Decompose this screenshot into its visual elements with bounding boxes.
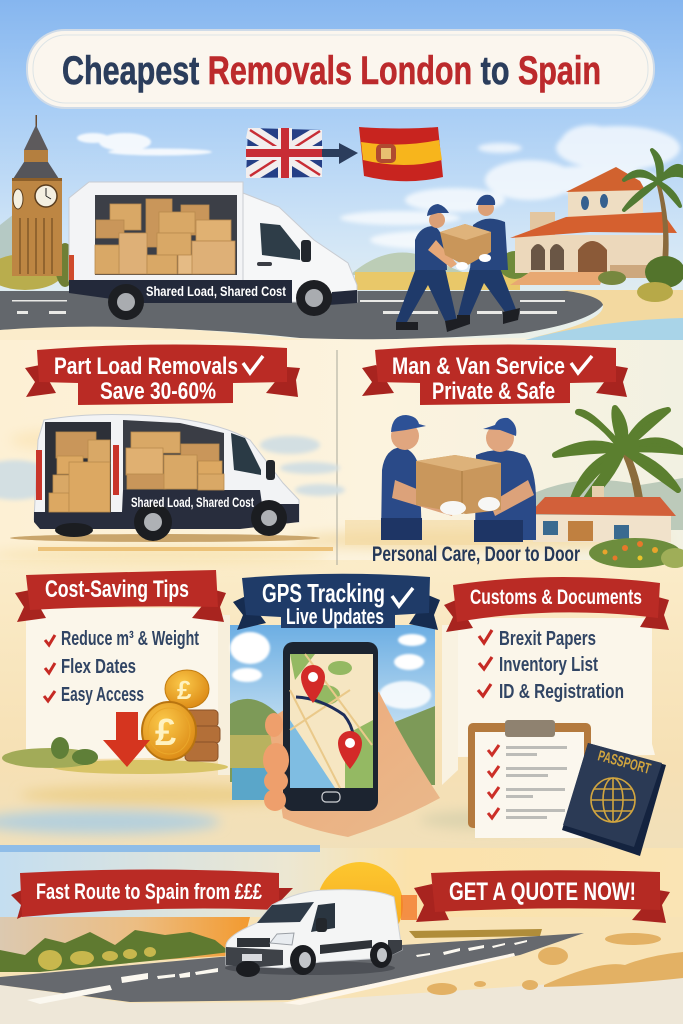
coin: small: £	[177, 675, 192, 705]
banner: get a quote	[414, 870, 670, 923]
customs card	[442, 625, 458, 785]
truck cargo body	[69, 182, 243, 281]
side window	[311, 903, 335, 932]
sand patches	[427, 933, 683, 995]
banner subtext: Save 30-60%	[100, 378, 216, 405]
cab window	[231, 433, 261, 475]
clipboard checks	[488, 745, 499, 818]
map water	[290, 720, 335, 788]
movers handing box	[381, 415, 536, 542]
van label: Shared Load, Shared Cost	[131, 494, 254, 510]
truck window	[260, 223, 300, 260]
icon: check	[571, 356, 592, 373]
map route	[296, 697, 353, 735]
GPS clouds	[230, 632, 431, 709]
tip checks	[44, 635, 55, 701]
truck wheels	[108, 280, 332, 320]
palm tree: mid	[555, 408, 683, 545]
banner text: Part Load Removals	[54, 353, 238, 380]
grass patch	[2, 737, 228, 774]
handed box	[416, 455, 501, 514]
fingers	[263, 713, 289, 811]
truck label: Shared Load, Shared Cost	[146, 283, 286, 299]
road dashes	[27, 940, 527, 1004]
item: brexit: Brexit Papers	[499, 628, 596, 650]
icon: check	[243, 356, 263, 373]
road markings	[12, 300, 565, 314]
windshield	[257, 902, 314, 923]
van wheels	[55, 500, 287, 541]
background: sunset lower sky	[0, 848, 683, 920]
icon: Big Ben	[12, 115, 62, 276]
background: blue horizon strip	[0, 845, 320, 852]
customs paper	[458, 618, 655, 757]
right worker	[457, 195, 520, 324]
arrow: UK to Spain	[322, 143, 358, 164]
left worker	[396, 204, 470, 332]
hills behind men	[520, 478, 683, 530]
GPS sky	[230, 625, 435, 780]
palm tree: top	[624, 150, 683, 262]
GPS fields left	[230, 735, 285, 768]
carried box	[440, 224, 491, 266]
rear bumper	[388, 940, 402, 957]
bumper	[226, 947, 283, 968]
document checks	[478, 630, 492, 696]
divider	[336, 350, 338, 565]
headlight	[270, 933, 294, 945]
arrow: down	[103, 712, 150, 767]
van boxes	[49, 432, 224, 512]
roadside bushes	[0, 930, 230, 972]
side opening	[123, 420, 224, 490]
truck interior	[95, 195, 237, 275]
GPS banner	[233, 574, 440, 630]
background: coastal wash	[0, 430, 670, 834]
background: sand ground	[0, 917, 683, 1024]
van body	[34, 414, 299, 525]
background: pale foreground	[0, 975, 683, 1024]
road: top	[0, 291, 603, 339]
clipboard lines	[506, 746, 567, 819]
icon: Spain flag	[359, 127, 443, 181]
icon: UK flag	[246, 128, 323, 178]
house: Spanish villa	[510, 167, 677, 285]
left mover	[381, 415, 455, 540]
truck boxes	[95, 199, 235, 274]
coin: small	[165, 670, 209, 708]
part-load van	[10, 414, 333, 551]
pin: destination	[338, 731, 362, 769]
wheels	[236, 942, 392, 977]
flower shrubs	[589, 538, 683, 568]
panel: cost-saving tips	[2, 570, 230, 775]
passport	[562, 743, 666, 856]
pin: origin	[301, 665, 325, 703]
truck front bumper	[328, 290, 357, 305]
white van: bottom	[225, 890, 402, 977]
gloves	[440, 501, 466, 515]
mid clouds left	[0, 436, 345, 500]
clipboard	[468, 720, 591, 838]
tip: reduce: Reduce m³ & Weight	[61, 628, 199, 650]
front grille	[237, 938, 270, 947]
banner text: Man & Van Service	[392, 353, 565, 380]
banner: fast route	[11, 870, 293, 919]
passport: PASSPORT	[596, 747, 653, 778]
coin: large: £	[155, 712, 176, 754]
GPS hills right	[395, 706, 435, 785]
tip: easy access: Easy Access	[61, 684, 144, 706]
hand	[268, 692, 440, 837]
background: dusk land	[0, 917, 250, 970]
banner: part load	[25, 344, 300, 405]
title text: Cheapest Removals London to Spain	[62, 49, 601, 93]
banner text: Fast Route to Spain from £££	[36, 879, 263, 904]
panel: GPS tracking	[230, 574, 440, 837]
tips banner	[15, 570, 226, 622]
banner text: GPS Tracking	[262, 578, 385, 608]
beach and sea	[0, 290, 683, 340]
hills and shrubs behind road	[0, 214, 531, 290]
delivery truck	[69, 182, 357, 320]
van body	[226, 890, 402, 968]
sand behind men	[345, 520, 520, 545]
road: bottom	[0, 933, 584, 1002]
sunset band	[401, 895, 417, 920]
clouds: top left	[77, 133, 212, 156]
map roads	[290, 654, 372, 788]
shrubs: right	[598, 256, 683, 302]
sun	[317, 862, 403, 948]
icon: check	[392, 588, 413, 606]
dark lower band	[34, 490, 299, 529]
tip: flex dates: Flex Dates	[61, 656, 136, 678]
coin stack	[185, 710, 220, 761]
GPS hills left	[230, 699, 285, 782]
GPS water	[232, 768, 288, 800]
title pill	[27, 30, 654, 108]
banner subtext: Private & Safe	[432, 378, 555, 405]
truck cab	[243, 193, 357, 302]
far hedge	[409, 929, 542, 938]
truck dark band	[69, 280, 292, 303]
background: sky	[0, 0, 683, 340]
background: tips section	[0, 560, 683, 850]
item: inventory: Inventory List	[499, 654, 598, 676]
clouds: top right	[340, 125, 680, 249]
caption: personal care: Personal Care, Door to Door	[372, 543, 580, 566]
coin: large	[142, 702, 196, 760]
rear opening	[45, 422, 111, 514]
small house	[529, 486, 676, 542]
side stripe	[320, 940, 372, 954]
tips card	[26, 608, 218, 760]
panel: customs and documents	[442, 577, 669, 856]
banner text: Cost-Saving Tips	[45, 576, 189, 603]
customs banner	[444, 577, 669, 632]
workers carrying box	[396, 195, 520, 332]
right mover	[474, 418, 536, 542]
road edge	[283, 953, 515, 1005]
background: cream middle	[0, 338, 683, 568]
item: ID: ID & Registration	[499, 681, 624, 703]
banner: man and van	[362, 344, 628, 405]
map green	[290, 654, 373, 788]
banner subtext: Live Updates	[286, 604, 384, 629]
phone	[283, 642, 378, 811]
